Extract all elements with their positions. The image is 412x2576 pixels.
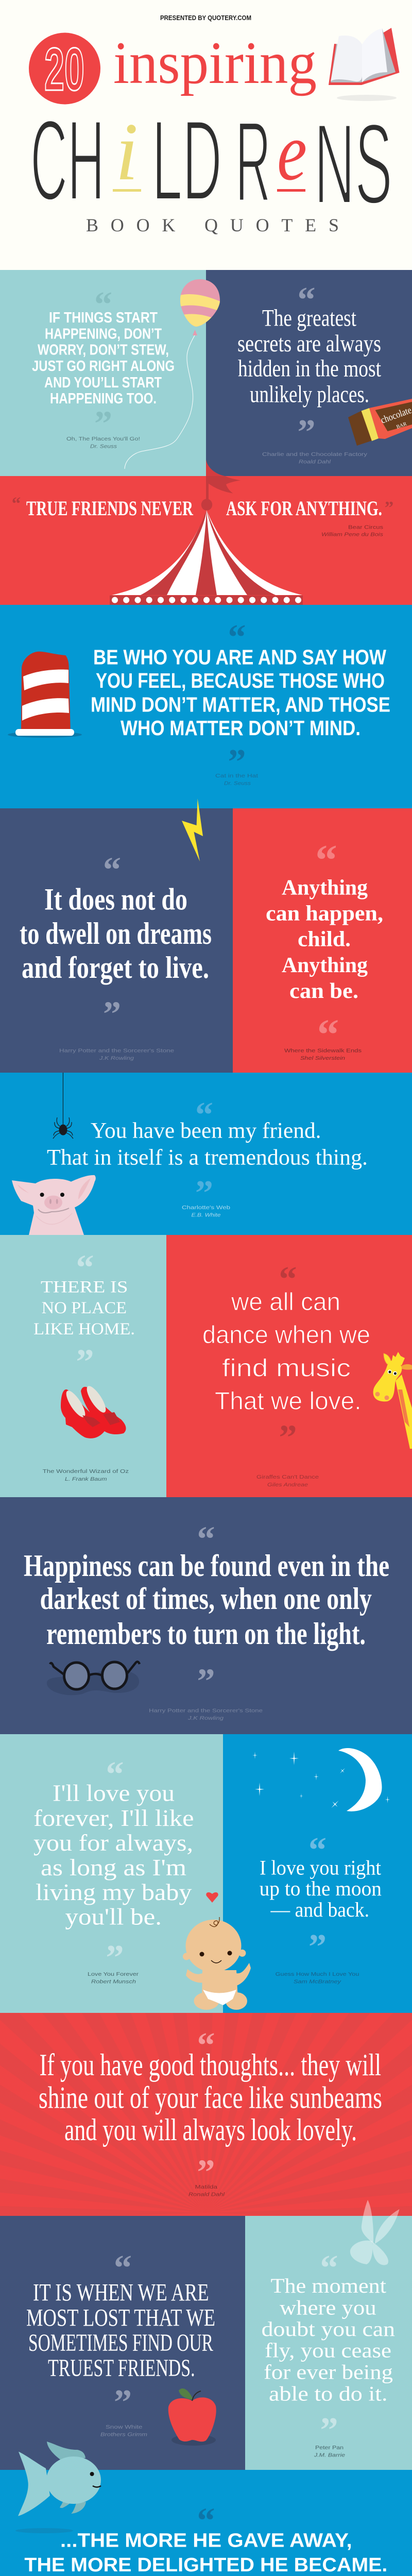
- source: [321, 524, 384, 538]
- source: Roald Dahl: [299, 459, 331, 465]
- source: The Wonderful Wizard of Oz: [43, 1468, 129, 1475]
- quote text: can happen,: [266, 902, 383, 925]
- quote text: JUST GO RIGHT ALONG: [32, 358, 175, 375]
- icon: pig: [12, 1175, 96, 1235]
- quote marks: “: [106, 1755, 124, 1794]
- source: Brothers Grimm: [100, 2432, 147, 2438]
- panel: bear circus: [0, 460, 412, 605]
- quote text: MOST LOST THAT WE: [26, 2304, 215, 2332]
- title word: childrens: R: [235, 98, 271, 226]
- source: Charlotte's Web: [182, 1205, 230, 1211]
- presented by line: PRESENTED BY QUOTERY.COM: [160, 14, 251, 22]
- source: [262, 451, 368, 465]
- quote text: Anything: [282, 876, 368, 900]
- quote marks: [114, 2248, 132, 2422]
- quote text: [32, 310, 175, 407]
- source: [284, 1048, 362, 1061]
- quote marks: ”: [298, 413, 315, 452]
- quote marks: [94, 285, 112, 444]
- source: Sam McBratney: [294, 1979, 341, 1985]
- title word: childrens: [30, 96, 392, 228]
- title word: childrens: CH: [30, 96, 105, 225]
- source: J.K Rowling: [187, 1715, 224, 1721]
- quote text: The greatest: [262, 305, 356, 332]
- quote marks: “: [197, 2501, 215, 2541]
- quote marks: “: [317, 1011, 339, 1059]
- quote text: able to do it.: [269, 2382, 387, 2405]
- source: [88, 1971, 139, 1985]
- quote text: [237, 305, 381, 408]
- icon: baby and heart: [183, 1892, 251, 2010]
- icon: spider: [53, 1073, 73, 1139]
- title word: childrens: LD: [152, 96, 222, 225]
- panel: charlotte's web: [0, 1073, 412, 1235]
- quote text: [33, 1278, 135, 1338]
- quote marks: [315, 836, 339, 1059]
- source: [59, 1048, 174, 1061]
- quote marks: [197, 1520, 215, 1702]
- title word: childrens: e: [277, 106, 307, 197]
- quote text: to dwell on dreams: [20, 917, 212, 951]
- source: Harry Potter and the Sorcerer's Stone: [149, 1708, 263, 1714]
- quote text: TRUE FRIENDS NEVER: [26, 497, 194, 520]
- panel: giraffes can't dance: [166, 1235, 412, 1497]
- quote marks: [308, 1831, 327, 1967]
- quote text: HAPPENING, DON’T: [45, 326, 162, 342]
- quote text: can be.: [289, 979, 358, 1003]
- quote text: where you: [280, 2296, 376, 2319]
- quote marks: “: [197, 1520, 215, 1559]
- quote text: WHO MATTER DON’T MIND.: [121, 716, 360, 740]
- icon: apple: [168, 2388, 216, 2446]
- source: [66, 436, 140, 449]
- quote text: ...THE MORE HE GAVE AWAY,: [60, 2530, 352, 2552]
- source: Cat in the Hat: [215, 773, 258, 779]
- panel: harry potter quote 1: [0, 799, 233, 1073]
- source: Dr. Seuss: [224, 781, 251, 787]
- quote text: [24, 1549, 389, 1651]
- panel: header: [0, 0, 412, 270]
- quote text: dance when we: [202, 1321, 370, 1349]
- quote marks: [76, 1248, 94, 1382]
- subtitle: book quotes: BOOK QUOTES: [86, 215, 339, 235]
- icon: round glasses: [47, 1662, 140, 1695]
- quote text: I love you right: [260, 1856, 381, 1879]
- panel: guess how much i love you: [223, 1734, 412, 2013]
- quote text: [26, 2279, 215, 2382]
- quote marks: ”: [94, 404, 112, 444]
- quote marks: “: [114, 2248, 132, 2288]
- quote marks: “: [315, 836, 337, 885]
- quote text: [260, 1856, 382, 1921]
- quote text: [262, 2274, 395, 2405]
- quote text: NO PLACE: [42, 1299, 127, 1317]
- quote marks: [12, 494, 393, 518]
- quote marks: [106, 1755, 124, 1978]
- quote marks: “: [308, 1831, 327, 1870]
- source: William Pene du Bois: [321, 532, 384, 538]
- panel: wizard of oz: [0, 1235, 166, 1497]
- quote marks: ”: [279, 1418, 297, 1458]
- quote text: you for always,: [33, 1829, 193, 1856]
- quote marks: “: [94, 285, 112, 325]
- quote marks: “: [103, 851, 121, 890]
- panel: oh the places you'll go: [0, 270, 206, 476]
- quote text: child.: [298, 927, 351, 951]
- quote text: up to the moon: [260, 1877, 382, 1900]
- quote marks: [195, 1095, 213, 1213]
- source: Where the Sidewalk Ends: [284, 1048, 362, 1054]
- quote text: THERE IS: [41, 1278, 128, 1297]
- quote marks: “: [12, 494, 21, 514]
- quote text: [39, 2048, 382, 2147]
- source: J.M. Barrie: [314, 2452, 345, 2459]
- source: [188, 2184, 225, 2197]
- quote text: [33, 1780, 194, 1930]
- quote text: [26, 497, 382, 520]
- panel: where the sidewalk ends: [233, 808, 412, 1073]
- quote text: fly, you cease: [265, 2339, 391, 2362]
- icon: striped hat: [8, 652, 82, 738]
- panel: snow white: [0, 2216, 245, 2470]
- quote text: That in itself is a tremendous thing.: [47, 1146, 368, 1170]
- quote marks: “: [228, 618, 246, 657]
- source: Guess How Much I Love You: [276, 1971, 359, 1977]
- quote text: — and back.: [270, 1898, 369, 1921]
- quote text: TRUEST FRIENDS.: [48, 2354, 195, 2382]
- source: L. Frank Baum: [65, 1476, 107, 1482]
- source: Snow White: [106, 2424, 143, 2430]
- number badge: 20: 20: [44, 36, 84, 104]
- quote marks: [320, 2248, 338, 2450]
- source: J.K Rowling: [99, 1055, 134, 1061]
- quote text: living my baby: [36, 1879, 192, 1905]
- quote marks: [103, 851, 121, 1035]
- source: Bear Circus: [348, 524, 383, 530]
- quote text: [91, 646, 390, 740]
- quote marks: “: [320, 2248, 338, 2288]
- source: Giraffes Can't Dance: [256, 1474, 319, 1480]
- source: [43, 1468, 129, 1482]
- quote marks: ”: [385, 498, 393, 518]
- quote marks: “: [76, 1248, 94, 1288]
- source: [276, 1971, 359, 1985]
- quote text: The moment: [271, 2274, 386, 2297]
- quote text: SOMETIMES FIND OUR: [28, 2329, 213, 2357]
- icon: fairy wings: [350, 2200, 400, 2265]
- panel: peter pan quote 1: [245, 2200, 412, 2470]
- icon: chocolate bar: BAR: [396, 421, 408, 430]
- quote text: for ever being: [264, 2361, 393, 2383]
- source: [215, 773, 258, 787]
- panel: matilda: [0, 2013, 412, 2216]
- title word: childrens: i: [115, 106, 138, 197]
- panel: cat in the hat: [0, 605, 412, 808]
- source: E.B. White: [192, 1212, 221, 1218]
- quote marks: [197, 2026, 215, 2192]
- quote text: you'll be.: [65, 1904, 162, 1930]
- number badge: 20: [29, 33, 100, 104]
- quote text: It does not do: [44, 883, 187, 917]
- source: [100, 2424, 147, 2438]
- quote text: [202, 1289, 370, 1415]
- quote text: I'll love you: [53, 1780, 175, 1806]
- source: Charlie and the Chocolate Factory: [262, 451, 368, 457]
- balloon: [125, 279, 222, 469]
- source: [149, 1708, 263, 1721]
- quote marks: ”: [106, 1938, 124, 1978]
- source: Dr. Seuss: [90, 443, 117, 449]
- quote marks: [228, 618, 246, 782]
- source: Love You Forever: [88, 1971, 139, 1977]
- source: Oh, The Places You'll Go!: [66, 436, 140, 442]
- quote text: AND YOU’LL START: [44, 375, 162, 391]
- icon: crescent moon and stars: [252, 1748, 390, 1811]
- quote text: Anything: [282, 954, 368, 977]
- quote marks: “: [279, 1260, 297, 1299]
- panel: charlie and the chocolate factory: [125, 270, 412, 476]
- quote text: we all can: [231, 1289, 340, 1316]
- source: Ronald Dahl: [188, 2191, 225, 2197]
- quote text: WORRY, DON’T STEW,: [38, 342, 169, 359]
- quote text: LIKE HOME.: [33, 1320, 135, 1338]
- quote marks: ”: [320, 2411, 338, 2450]
- quote text: [266, 876, 383, 1003]
- source: Shel Silverstein: [300, 1055, 345, 1061]
- quote text: IF THINGS START: [49, 310, 158, 326]
- panel: rainbow fish: [0, 2442, 412, 2576]
- source: Harry Potter and the Sorcerer's Stone: [59, 1048, 174, 1054]
- source: [256, 1474, 319, 1488]
- icon: ruby slippers: [61, 1383, 126, 1438]
- panel: harry potter quote 2: [0, 1497, 412, 1734]
- quote text: [20, 883, 212, 985]
- quote text: That we love.: [215, 1388, 362, 1415]
- icon: fish: [15, 2442, 101, 2533]
- panel: love you forever: [0, 1734, 223, 2013]
- icon: circus tent: [110, 460, 303, 605]
- source: Matilda: [195, 2184, 217, 2190]
- quote text: secrets are always: [237, 330, 381, 357]
- quote text: forever, I'll like: [33, 1805, 194, 1831]
- quote text: doubt you can: [262, 2317, 395, 2341]
- quote text: [24, 2530, 387, 2576]
- quote marks: “: [195, 1095, 213, 1135]
- quote marks: ”: [195, 1174, 213, 1213]
- source: [314, 2445, 345, 2459]
- quote marks: [298, 280, 315, 452]
- quote marks: ”: [197, 2153, 215, 2192]
- quote marks: [279, 1260, 297, 1458]
- quote text: [47, 1119, 368, 1170]
- quote text: and forget to live.: [22, 951, 209, 985]
- quote marks: “: [298, 280, 315, 320]
- icon: chocolate bar: [348, 399, 412, 446]
- title word: inspiring: inspiring: [113, 30, 317, 96]
- source: [182, 1205, 230, 1218]
- quote marks: ”: [308, 1927, 327, 1967]
- quote text: THE MORE DELIGHTED HE BECAME.: [24, 2554, 387, 2576]
- source: Peter Pan: [315, 2445, 344, 2451]
- quote marks: “: [197, 2026, 215, 2065]
- quote text: You have been my friend.: [91, 1119, 321, 1143]
- icon: lightning bolt: [182, 799, 203, 861]
- quote marks: ”: [114, 2383, 132, 2422]
- source: Giles Andreae: [267, 1482, 308, 1488]
- quote marks: ”: [228, 742, 246, 782]
- icon: giraffe: [373, 1352, 412, 1449]
- quote marks: ”: [76, 1343, 94, 1382]
- quote text: HAPPENING TOO.: [50, 391, 157, 407]
- icon: open book: [329, 28, 400, 101]
- quote text: as long as I'm: [41, 1854, 186, 1880]
- quote text: find music: [222, 1354, 351, 1382]
- quote marks: ”: [103, 995, 121, 1035]
- quote text: unlikely places.: [250, 381, 369, 408]
- quote text: IT IS WHEN WE ARE: [33, 2279, 209, 2307]
- source: Robert Munsch: [91, 1979, 136, 1985]
- quote marks: ”: [197, 1662, 215, 1702]
